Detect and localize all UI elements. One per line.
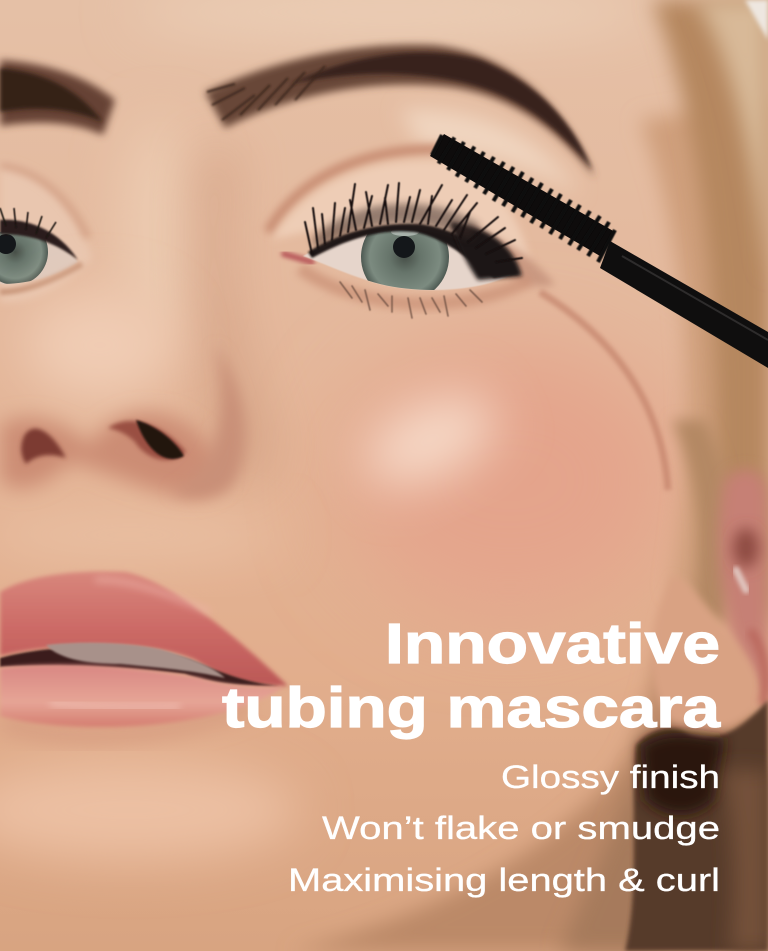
- blond hair top right: [652, 0, 768, 620]
- bristles: [432, 135, 615, 262]
- benefits list: Glossy finish: [501, 759, 720, 795]
- left lashes: [0, 208, 78, 260]
- crease shadow: [268, 149, 450, 232]
- benefits list: Maximising length & curl: [288, 862, 720, 898]
- benefits list: [288, 759, 720, 898]
- eyewhite: [303, 228, 512, 290]
- nose side shadow: [196, 150, 275, 500]
- nose: [0, 290, 246, 497]
- hair highlight: [695, 0, 768, 280]
- lower lashes: [340, 282, 482, 318]
- eyelid: [272, 161, 530, 260]
- ear dark fold: [733, 528, 759, 568]
- headline: [222, 612, 722, 740]
- upper lash root mass: [308, 224, 518, 278]
- darker neck near hair: [560, 760, 660, 951]
- left eyebrow: [0, 60, 115, 135]
- white corner: [745, 0, 768, 40]
- ear lobe: [651, 575, 760, 732]
- mouth opening: [0, 647, 280, 686]
- contour line on cheek: [540, 292, 668, 490]
- cheek blush: [345, 345, 675, 615]
- right nostril: [108, 421, 186, 460]
- lip surrounding shade: [0, 705, 250, 735]
- under eye red line: [300, 268, 530, 304]
- right eye socket: [268, 109, 580, 304]
- left crease: [0, 165, 88, 238]
- brow bone highlight: [400, 109, 580, 195]
- pink tear duct: [284, 254, 312, 262]
- brow hairs: [207, 66, 325, 120]
- outer eyelid shade: [470, 225, 555, 286]
- dark hair behind neck: [625, 700, 768, 951]
- left iris clipped: [0, 232, 48, 284]
- dark nostril core: [136, 420, 184, 459]
- iris clipped by lids: [361, 230, 449, 290]
- nostril shade: [0, 412, 223, 497]
- upper lip: [0, 572, 288, 686]
- lip upper surround: [0, 507, 280, 563]
- headline: tubing mascara: [222, 676, 722, 740]
- wand brush core: [430, 134, 615, 256]
- lip gloss: [95, 580, 210, 612]
- wand handle: [600, 241, 768, 368]
- hair lighter strand: [722, 770, 768, 951]
- lower lip gloss: [50, 703, 180, 708]
- lower lip: [0, 665, 284, 727]
- mascara wand: [430, 134, 768, 368]
- left eyewhite: [0, 231, 78, 284]
- headline: Innovative: [385, 612, 720, 676]
- benefits list: Won’t flake or smudge: [322, 810, 720, 846]
- right eye: [284, 183, 522, 318]
- right eyebrow: [205, 45, 595, 178]
- upper lash strokes: [305, 183, 522, 262]
- outer lash mass: [450, 222, 522, 280]
- nose tip highlight: [25, 290, 175, 400]
- ear rim red: [750, 630, 766, 705]
- left lower lash shade: [0, 264, 82, 292]
- hair and neck on right edge: [290, 0, 768, 951]
- chin light: [0, 760, 300, 860]
- mouth: [0, 572, 288, 735]
- teeth: [46, 643, 225, 678]
- darkest hair under lobe: [640, 733, 725, 815]
- left nostril: [21, 429, 66, 464]
- cheek highlight: [350, 376, 510, 504]
- wand handle sheen: [622, 256, 768, 340]
- left eye: [0, 160, 92, 302]
- wing of nose: [170, 345, 246, 497]
- neck and jaw shadow: [290, 650, 768, 951]
- hair strands near ear: [672, 420, 734, 625]
- ear glint: [736, 570, 746, 590]
- left eyelid: [0, 160, 92, 302]
- nose bridge highlight: [118, 120, 202, 340]
- ear upper pink: [719, 470, 768, 700]
- forehead tone: [130, 0, 650, 42]
- upper lash soft haze: [312, 204, 480, 250]
- face edge shade: [640, 100, 768, 640]
